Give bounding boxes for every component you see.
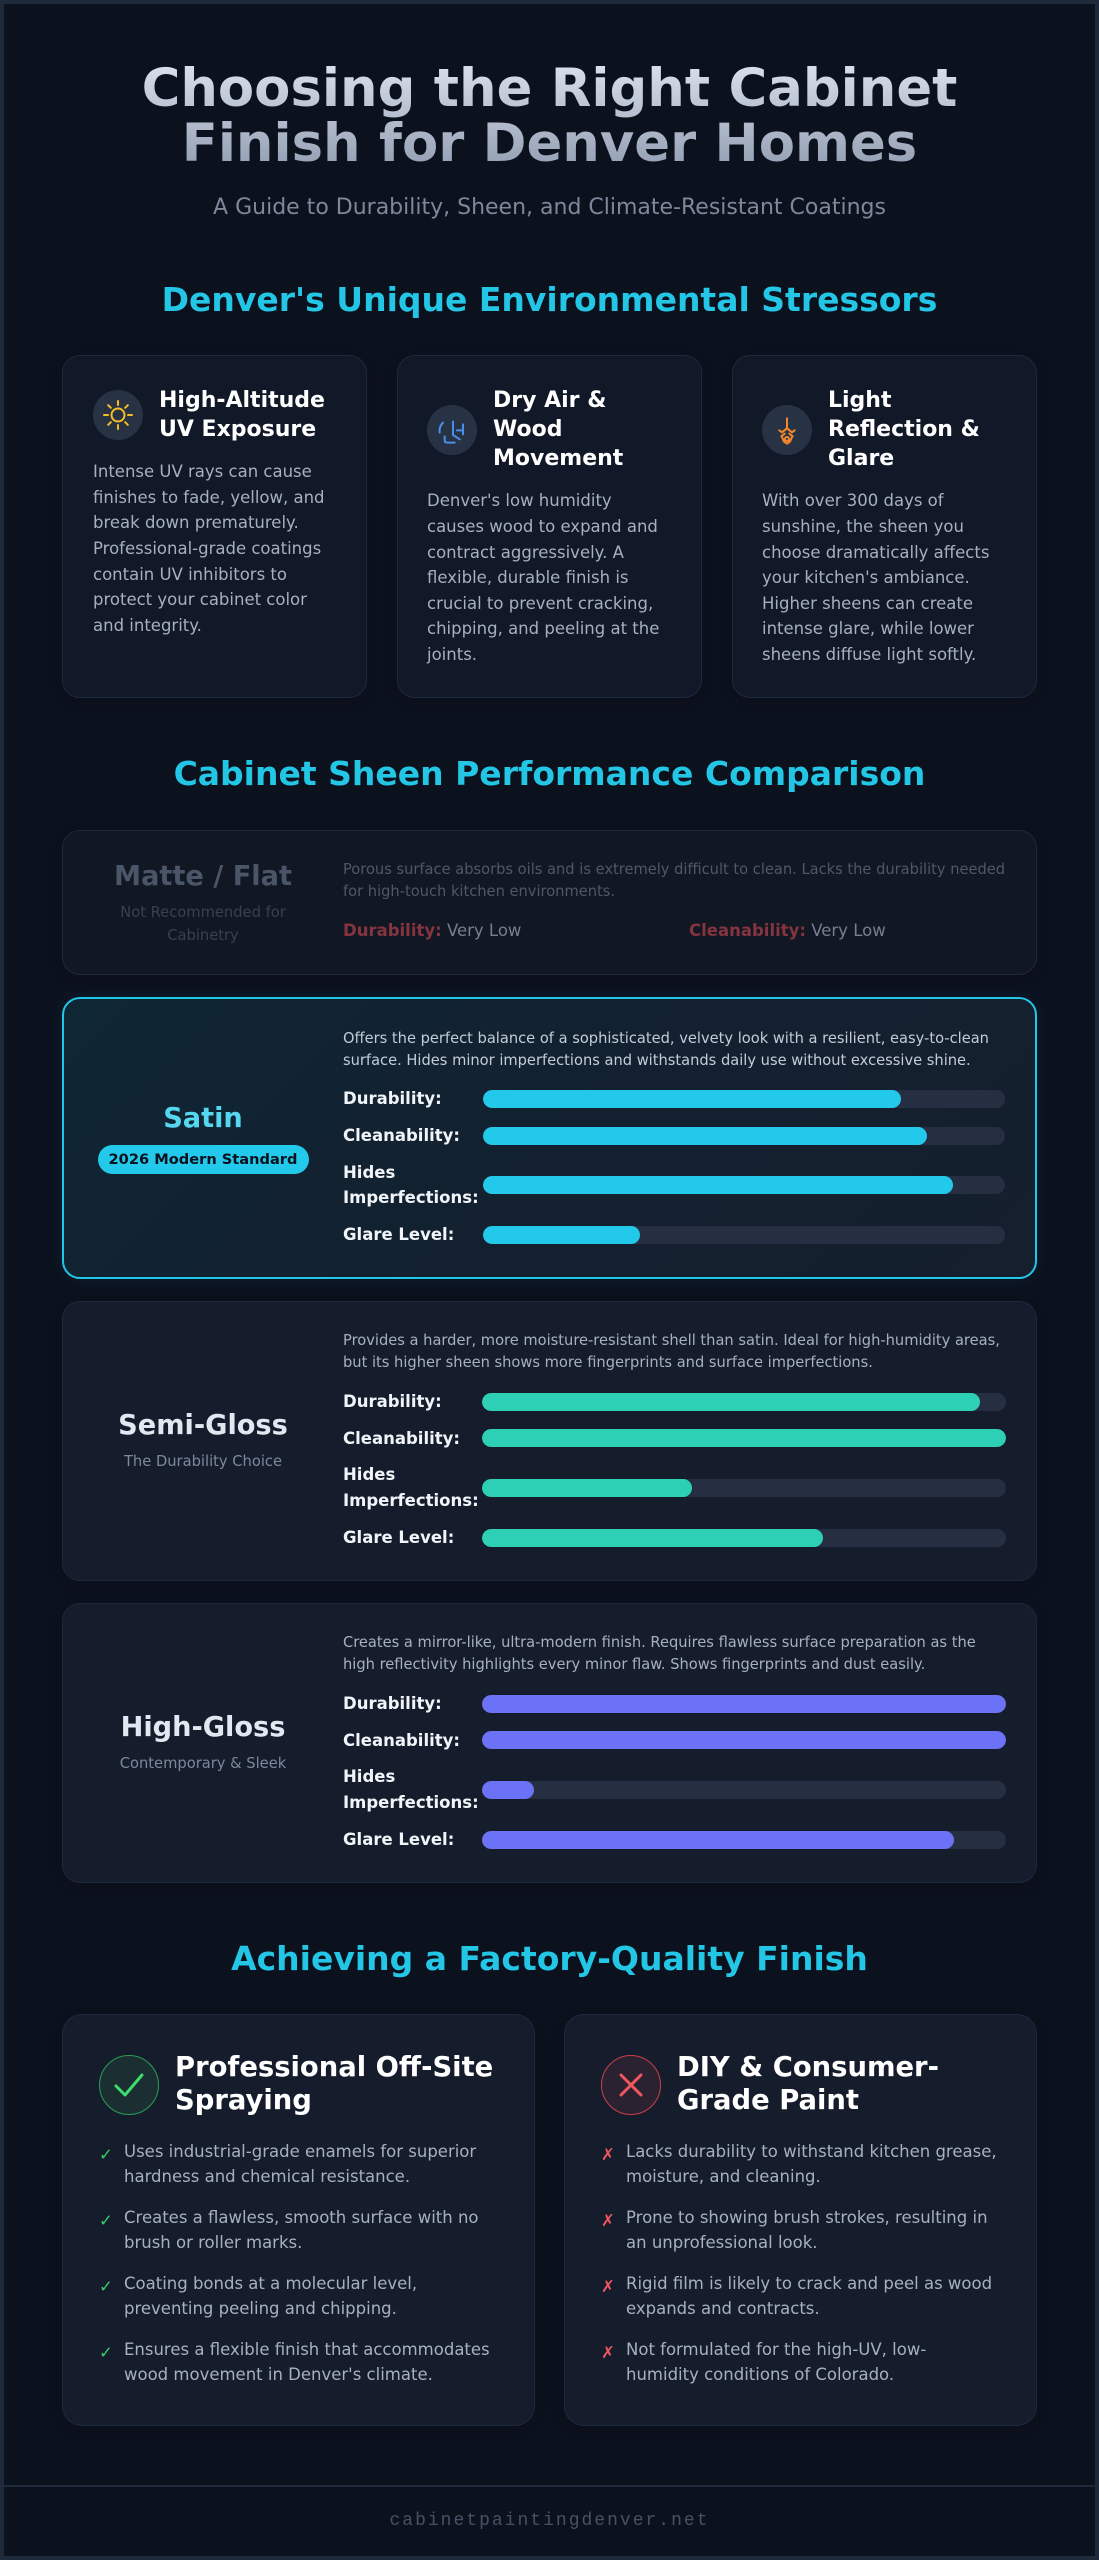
footer url: cabinetpaintingdenver.net xyxy=(389,2511,710,2531)
semi-gloss name: Semi-Gloss xyxy=(118,1410,288,1441)
high-gloss description: Creates a mirror-like, ultra-modern finish. Requires flawless surface preparation as the xyxy=(343,1634,976,1651)
card text: sunshine, the sheen you xyxy=(762,517,964,536)
card heading: High-Altitude xyxy=(159,388,325,413)
benefits list: Creates a flawless, smooth surface with no xyxy=(124,2208,479,2227)
drawbacks list: expands and contracts. xyxy=(626,2299,820,2318)
heading: sheen comparison: Cabinet Sheen Performance Comparison xyxy=(174,754,925,793)
benefits list: ✓ xyxy=(99,2211,113,2230)
satin bar chart xyxy=(343,1089,1005,1244)
high-gloss bar chart: Durability: xyxy=(343,1694,442,1713)
matte description xyxy=(343,861,1005,900)
card text: intense glare, while lower xyxy=(762,619,974,638)
drawbacks list: moisture, and cleaning. xyxy=(626,2167,821,2186)
semi-gloss bar chart: Glare Level: xyxy=(343,1528,454,1547)
drawbacks list: Not formulated for the high-UV, low- xyxy=(626,2340,926,2359)
card heading: Wood xyxy=(493,417,562,442)
benefits list: Uses industrial-grade enamels for superior xyxy=(124,2142,476,2161)
satin name and badge xyxy=(98,1103,309,1174)
drawbacks list: humidity conditions of Colorado. xyxy=(626,2365,894,2384)
panel: dry air and wood movement xyxy=(397,355,702,698)
panel: satin xyxy=(62,997,1037,1278)
card text: Denver's low humidity xyxy=(427,491,612,510)
benefits list: brush or roller marks. xyxy=(124,2233,302,2252)
panel: semi-gloss xyxy=(62,1300,1037,1580)
card text: sheens diffuse light softly. xyxy=(762,645,976,664)
matte ratings: Cleanability: Very Low xyxy=(689,921,886,940)
satin description: Offers the perfect balance of a sophisticated, velvety look with a resilient, easy-to-clean xyxy=(343,1030,989,1047)
title: Finish for Denver Homes xyxy=(182,113,917,174)
benefits list xyxy=(99,2142,490,2384)
card text: joints. xyxy=(427,645,477,664)
satin bar chart: Cleanability: xyxy=(343,1126,460,1145)
high-gloss name: High-Gloss xyxy=(121,1712,285,1743)
card text: contract aggressively. A xyxy=(427,543,624,562)
card text: Professional-grade coatings xyxy=(93,539,321,558)
icon: light glare xyxy=(762,405,812,455)
satin description: surface. Hides minor imperfections and withstands daily use without excessive shine. xyxy=(343,1052,971,1069)
semi-gloss bar chart: Durability: xyxy=(343,1392,442,1411)
satin bar chart: Glare Level: xyxy=(343,1225,454,1244)
matte ratings: Durability: Very Low xyxy=(343,921,521,940)
panel heading xyxy=(677,2052,939,2116)
semi-gloss description: but its higher sheen shows more fingerprints and surface imperfections. xyxy=(343,1354,873,1371)
card heading: Glare xyxy=(828,446,894,471)
panel heading xyxy=(175,2052,493,2116)
title: Choosing the Right Cabinet xyxy=(142,58,957,119)
satin bar chart: Durability: xyxy=(343,1089,442,1108)
subtitle: A Guide to Durability, Sheen, and Climate-Resistant Coatings xyxy=(213,195,886,220)
panel heading: Professional Off-Site xyxy=(175,2052,493,2083)
satin bar chart: Hides xyxy=(343,1163,395,1182)
matte name: Not Recommended for xyxy=(120,904,286,921)
card heading: Light xyxy=(828,388,892,413)
satin description xyxy=(343,1030,989,1069)
card heading: UV Exposure xyxy=(159,417,316,442)
panel heading: Spraying xyxy=(175,2085,312,2116)
semi-gloss bar chart: Imperfections: xyxy=(343,1491,479,1510)
card text: Higher sheens can create xyxy=(762,594,973,613)
drawbacks list: an unprofessional look. xyxy=(626,2233,818,2252)
card heading xyxy=(159,388,325,442)
card text: break down prematurely. xyxy=(93,513,299,532)
card text: chipping, and peeling at the xyxy=(427,619,659,638)
drawbacks list: Prone to showing brush strokes, resulting in xyxy=(626,2208,988,2227)
drawbacks list: ✗ xyxy=(601,2211,615,2230)
card text: contain UV inhibitors to xyxy=(93,565,287,584)
card text xyxy=(93,462,325,635)
benefits list: ✓ xyxy=(99,2343,113,2362)
drawbacks list: ✗ xyxy=(601,2343,615,2362)
card text xyxy=(426,491,659,664)
card text: crucial to prevent cracking, xyxy=(427,594,653,613)
matte name xyxy=(114,861,292,944)
semi-gloss bar chart: Hides xyxy=(343,1465,395,1484)
high-gloss bar chart: Hides xyxy=(343,1767,395,1786)
panel heading: DIY & Consumer- xyxy=(677,2052,939,2083)
benefits list: ✓ xyxy=(99,2277,113,2296)
panel heading: Grade Paint xyxy=(677,2085,859,2116)
panel: light reflection and glare xyxy=(732,355,1037,698)
card heading xyxy=(493,388,623,471)
drawbacks list: ✗ xyxy=(601,2145,615,2164)
matte description: Porous surface absorbs oils and is extremely difficult to clean. Lacks the durability needed xyxy=(343,861,1005,878)
satin name and badge: 2026 Modern Standard xyxy=(109,1151,297,1168)
satin bar chart: Imperfections: xyxy=(343,1188,479,1207)
high-gloss bar chart: Cleanability: xyxy=(343,1731,460,1750)
benefits list: ✓ xyxy=(99,2145,113,2164)
benefits list: wood movement in Denver's climate. xyxy=(124,2365,433,2384)
drawbacks list: Lacks durability to withstand kitchen grease, xyxy=(626,2142,997,2161)
panel: professional off-site spraying xyxy=(62,2014,535,2426)
card text: choose dramatically affects xyxy=(762,543,989,562)
high-gloss description: high reflectivity highlights every minor flaw. Shows fingerprints and dust easily. xyxy=(343,1656,925,1673)
high-gloss description xyxy=(343,1634,976,1673)
panel: high-altitude UV exposure xyxy=(62,355,367,698)
panel: high-gloss xyxy=(62,1602,1037,1882)
semi-gloss name xyxy=(118,1410,288,1470)
matte ratings xyxy=(343,921,886,940)
benefits list: hardness and chemical resistance. xyxy=(124,2167,410,2186)
high-gloss bar chart: Imperfections: xyxy=(343,1793,479,1812)
card text: causes wood to expand and xyxy=(427,517,658,536)
benefits list: Coating bonds at a molecular level, xyxy=(124,2274,417,2293)
drawbacks list xyxy=(601,2142,997,2384)
card heading: Reflection & xyxy=(828,417,980,442)
semi-gloss description xyxy=(343,1332,1000,1371)
high-gloss bar chart: Glare Level: xyxy=(343,1830,454,1849)
matte description: for high-touch kitchen environments. xyxy=(343,883,615,900)
heading: factory-quality finish: Achieving a Factory-Quality Finish xyxy=(231,1939,868,1978)
card text: With over 300 days of xyxy=(762,491,944,510)
semi-gloss description: Provides a harder, more moisture-resistant shell than satin. Ideal for high-humidity areas, xyxy=(343,1332,1000,1349)
drawbacks list: Rigid film is likely to crack and peel as wood xyxy=(626,2274,992,2293)
icon: green check xyxy=(99,2055,159,2115)
card text: finishes to fade, yellow, and xyxy=(93,488,325,507)
high-gloss name: Contemporary & Sleek xyxy=(120,1755,286,1772)
high-gloss bar chart xyxy=(343,1694,1006,1849)
semi-gloss bar chart: Cleanability: xyxy=(343,1429,460,1448)
matte name: Cabinetry xyxy=(167,927,239,944)
card heading: Movement xyxy=(493,446,623,471)
heading: environmental stressors: Denver's Unique Environmental Stressors xyxy=(162,280,937,319)
icon: sun xyxy=(93,390,143,440)
semi-gloss name: The Durability Choice xyxy=(124,1453,282,1470)
card text xyxy=(762,491,989,664)
card text: your kitchen's ambiance. xyxy=(762,568,970,587)
satin name and badge: Satin xyxy=(163,1103,243,1134)
icon: red cross xyxy=(601,2055,661,2115)
card heading: Dry Air & xyxy=(493,388,606,413)
panel: DIY and consumer-grade paint xyxy=(564,2014,1037,2426)
card heading xyxy=(828,388,980,471)
card text: protect your cabinet color xyxy=(93,590,307,609)
benefits list: preventing peeling and chipping. xyxy=(124,2299,397,2318)
semi-gloss bar chart xyxy=(343,1392,1006,1547)
card text: flexible, durable finish is xyxy=(427,568,628,587)
card text: Intense UV rays can cause xyxy=(93,462,312,481)
matte name: Matte / Flat xyxy=(114,861,292,892)
panel: matte / flat xyxy=(62,830,1037,975)
icon: wood movement xyxy=(427,405,477,455)
benefits list: Ensures a flexible finish that accommodates xyxy=(124,2340,490,2359)
drawbacks list: ✗ xyxy=(601,2277,615,2296)
title xyxy=(0,61,1099,171)
card text: and integrity. xyxy=(93,616,202,635)
high-gloss name xyxy=(120,1712,286,1772)
